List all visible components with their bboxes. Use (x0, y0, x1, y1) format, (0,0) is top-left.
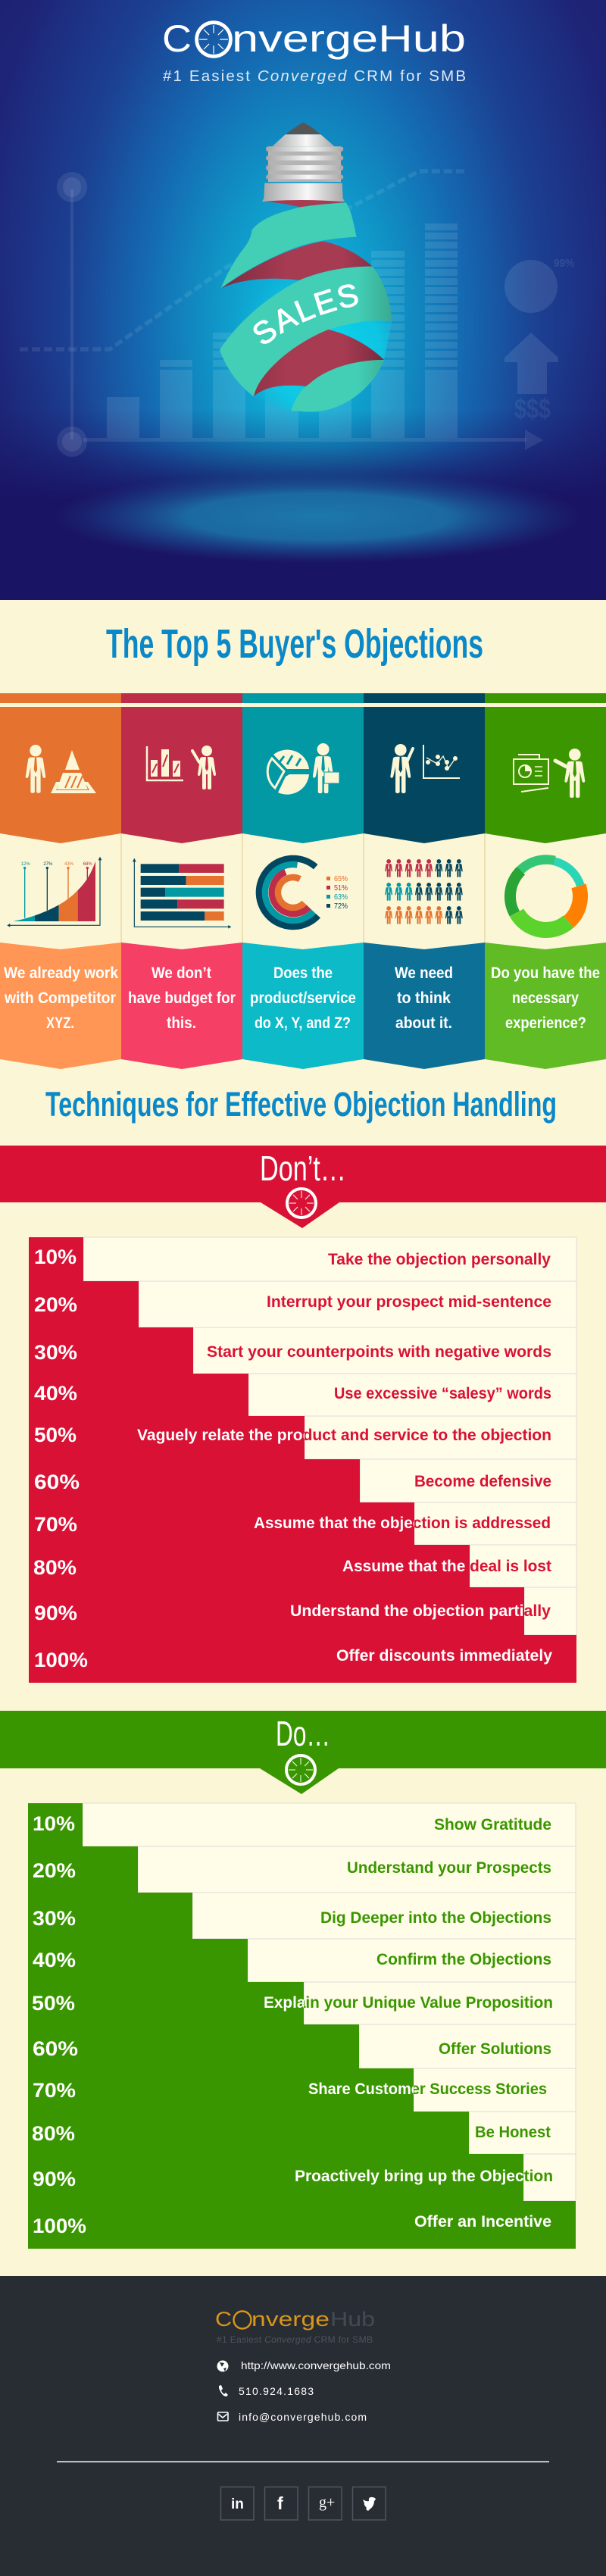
social: linkedin (221, 2487, 254, 2520)
tagline: #1 Easiest Converged CRM for SMB (163, 67, 466, 85)
row 40%: 40% (34, 1382, 77, 1405)
row 30% (28, 1893, 576, 1940)
footer logo: Hub (330, 2308, 375, 2331)
row 100% (28, 2201, 576, 2249)
row 80% (29, 1545, 576, 1588)
chart: radial progress with legend: 63% (334, 893, 348, 902)
chart: growth curve: 43% (64, 861, 73, 867)
row 10% (29, 1237, 576, 1282)
row 20%: Understand your Prospects (347, 1859, 551, 1877)
panel: do table (28, 1803, 576, 2249)
chart: radial progress with legend: 65% (334, 874, 348, 883)
row 20% (29, 1281, 576, 1327)
panel: objection 3 (242, 943, 364, 1069)
row 40%: 40% (33, 1949, 76, 1971)
panel: objection 2: this. (167, 1014, 196, 1032)
row 40% (28, 1939, 576, 1982)
icon: light bulb with sales ribbon (220, 123, 392, 412)
panel: objection 1 (0, 943, 121, 1069)
panel: objection 1: XYZ. (46, 1014, 74, 1032)
contact: email: info@convergehub.com (239, 2411, 367, 2423)
row 80% (28, 2112, 576, 2155)
row 20%: 20% (33, 1859, 76, 1882)
icon: don't wheel (287, 1189, 316, 1218)
row 100%: Offer discounts immediately (336, 1647, 552, 1665)
panel: objection 4: to think (397, 989, 451, 1007)
panel: do banner: Do… (276, 1714, 330, 1753)
row 20%: 20% (34, 1293, 77, 1316)
panel: objection 4: about it. (395, 1014, 452, 1032)
panel: chart strip dividers (121, 833, 485, 943)
row 100%: 100% (33, 2215, 86, 2237)
row 100%: Offer an Incentive (414, 2213, 551, 2231)
row 90%: 90% (33, 2168, 76, 2190)
panel: objection 3: do X, Y, and Z? (255, 1014, 351, 1032)
icon: person with pyramid (26, 745, 96, 793)
row 70%: 70% (33, 2079, 76, 2102)
social: linkedin: in (231, 2496, 244, 2512)
faded dashed trend line (20, 171, 466, 349)
row 40% (29, 1374, 576, 1417)
panel: objection 1: We already work (4, 964, 118, 982)
chart: stacked horizontal bars (133, 858, 231, 929)
row 30%: 30% (34, 1341, 77, 1364)
row 60% (29, 1459, 576, 1503)
row 50%: 50% (34, 1424, 77, 1446)
faded gauge and arrow: $$$ (514, 393, 551, 424)
row 60%: 60% (34, 1471, 80, 1493)
chart: radial progress with legend: 72% (334, 902, 348, 911)
faded gauge and arrow (504, 257, 574, 424)
row 90%: 90% (34, 1602, 77, 1624)
panel: objection 2: have budget for (128, 989, 236, 1007)
footer logo: C (215, 2308, 232, 2331)
chart: growth curve: 27% (43, 861, 53, 867)
row 70% (29, 1502, 576, 1546)
panel: objection 5: experience? (505, 1014, 586, 1032)
row 50%: Vaguely relate the product and service to the objection (137, 1427, 551, 1444)
row 40%: Use excessive “salesy” words (334, 1385, 551, 1402)
contact: phone: 510.924.1683 (239, 2385, 314, 2397)
row 10%: 10% (33, 1812, 75, 1835)
row 60% (28, 2024, 576, 2068)
row 10%: Take the objection personally (328, 1251, 551, 1268)
row 80%: Assume that the deal is lost (342, 1558, 551, 1575)
row 50% (29, 1416, 576, 1459)
row 30%: Dig Deeper into the Objections (320, 1909, 551, 1927)
panel: objection 5 (485, 943, 606, 1069)
panel: objection 2 (121, 943, 242, 1069)
footer logo: nverge (251, 2308, 330, 2331)
row 100%: 100% (34, 1649, 88, 1671)
row 10% (28, 1803, 576, 1847)
row 40%: Confirm the Objections (376, 1951, 551, 1968)
chart: growth curve: 12% (21, 861, 30, 867)
ribbon text: SALES (253, 284, 358, 344)
panel: don't table (29, 1237, 576, 1683)
panel: coloured icon banners (0, 707, 606, 843)
icon: person with line chart (390, 744, 460, 793)
panel: objection 2: We don’t (152, 964, 211, 982)
social: facebook: f (277, 2493, 283, 2513)
faded gauge and arrow: 99% (554, 257, 574, 270)
row 90% (28, 2154, 576, 2202)
faded axes (57, 172, 543, 457)
row 70%: 70% (34, 1513, 77, 1536)
social: google plus: g+ (319, 2494, 335, 2511)
contact: website: http://www.convergehub.com (241, 2359, 391, 2371)
logo: nvergeHub (232, 17, 466, 60)
row 50%: Explain your Unique Value Proposition (264, 1994, 553, 2012)
panel: footer (0, 2276, 606, 2576)
chart: radial progress with legend (259, 858, 348, 927)
row 90% (29, 1587, 576, 1635)
chart: segmented donut (510, 859, 580, 930)
panel: hero (0, 0, 606, 600)
row 70% (28, 2068, 576, 2112)
row 90%: Proactively bring up the Objection (295, 2168, 553, 2185)
logo (162, 17, 466, 60)
row 20%: Interrupt your prospect mid-sentence (267, 1293, 551, 1311)
row 100% (29, 1635, 576, 1683)
panel: don't banner (0, 1146, 606, 1228)
social: twitter (353, 2487, 386, 2520)
chart: people pictogram (385, 859, 463, 924)
row 70%: Share Customer Success Stories (308, 2080, 547, 2098)
panel: objection columns top strip (0, 693, 606, 703)
row 50%: 50% (32, 1992, 75, 2015)
social: google plus (309, 2487, 342, 2520)
icon: person with bar chart (147, 746, 216, 789)
row 30%: 30% (33, 1907, 76, 1930)
row 80%: Be Honest (475, 2124, 551, 2141)
row 80%: 80% (33, 1556, 77, 1579)
panel: do banner (0, 1711, 606, 1794)
row 90%: Understand the objection partially (290, 1602, 551, 1620)
panel: objection 1: with Competitor (4, 989, 116, 1007)
row 60%: Offer Solutions (439, 2040, 551, 2058)
logo: C (162, 17, 192, 60)
faded background bar chart (107, 224, 458, 438)
chart: growth curve: 68% (83, 861, 92, 867)
chart: radial progress with legend: 51% (334, 883, 348, 893)
icon: person with pie and briefcase (267, 743, 339, 795)
panel: objection 4 (364, 943, 485, 1069)
panel: objection 4: We need (395, 964, 453, 982)
row 10%: Show Gratitude (434, 1816, 551, 1834)
row 60%: Become defensive (414, 1473, 551, 1490)
footer logo (215, 2308, 375, 2331)
social: facebook (265, 2487, 298, 2520)
panel: objection 3: Does the (273, 964, 333, 982)
row 70%: Assume that the objection is addressed (254, 1515, 551, 1532)
row 60%: 60% (33, 2037, 78, 2060)
row 30% (29, 1327, 576, 1374)
row 30%: Start your counterpoints with negative words (207, 1343, 551, 1361)
footer tagline: #1 Easiest Converged CRM for SMB (217, 2334, 373, 2345)
panel: objection 5: necessary (512, 989, 579, 1007)
panel: objection 3: product/service (250, 989, 356, 1007)
icon: do wheel (286, 1755, 315, 1784)
chart: growth curve (7, 857, 102, 927)
row 80%: 80% (32, 2122, 75, 2145)
row 50% (28, 1982, 576, 2024)
panel: don't banner: Don’t… (260, 1149, 346, 1188)
icon: person presenting report (514, 749, 585, 798)
row 10%: 10% (34, 1246, 77, 1268)
row 20% (28, 1846, 576, 1893)
